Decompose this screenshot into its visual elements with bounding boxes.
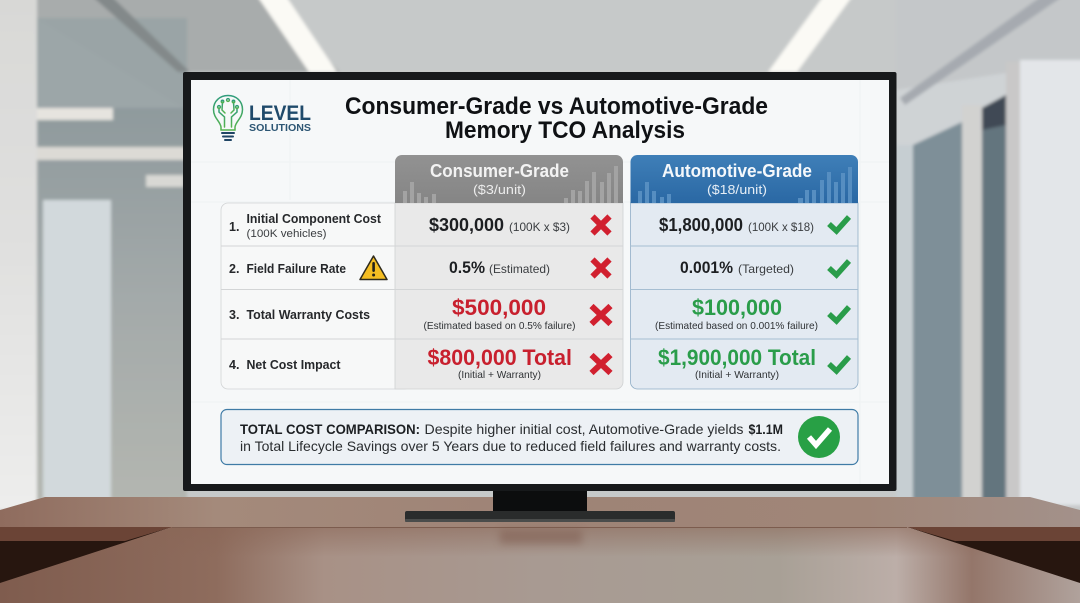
callout: total cost comparison	[221, 410, 858, 464]
icon: red cross	[592, 306, 610, 324]
row 2 label	[229, 256, 387, 280]
panel: automotive-grade column	[630, 155, 858, 389]
header bar decoration	[638, 167, 852, 203]
icon: circuit light bulb	[214, 96, 242, 130]
consumer row 1	[429, 215, 610, 235]
automotive row 2: 0.001%	[680, 258, 733, 277]
header bar decoration	[403, 166, 618, 203]
automotive row 3: (Estimated based on 0.001% failure)	[655, 320, 818, 332]
conference table	[0, 497, 1080, 603]
row 1 label	[229, 212, 382, 240]
consumer row 2	[449, 258, 610, 277]
automotive row 3	[655, 295, 849, 332]
row 4 label: Net Cost Impact	[246, 358, 341, 372]
automotive row 4: (Initial + Warranty)	[695, 369, 779, 381]
icon: green check	[829, 307, 849, 321]
automotive row 1: $1,800,000	[659, 215, 743, 235]
row 4 label: 4.	[229, 358, 239, 372]
row 1 label: (100K vehicles)	[246, 228, 326, 240]
consumer header: ($3/unit)	[473, 182, 526, 197]
consumer row 3	[424, 295, 610, 332]
icon: green check	[829, 217, 849, 231]
icon: warning triangle	[360, 256, 387, 280]
automotive row 3: $100,000	[692, 295, 782, 320]
consumer row 3: (Estimated based on 0.5% failure)	[424, 320, 576, 332]
automotive header: ($18/unit)	[707, 182, 767, 197]
title: Consumer-Grade vs Automotive-Grade	[345, 93, 768, 120]
consumer row 1: $300,000	[429, 215, 504, 235]
automotive row 2: (Targeted)	[738, 262, 794, 276]
monitor stand	[405, 488, 675, 522]
monitor frame	[183, 72, 896, 491]
row 2 label: Field Failure Rate	[246, 262, 346, 276]
automotive header	[630, 155, 858, 203]
row 1 label: 1.	[229, 220, 239, 234]
automotive header: Automotive-Grade	[662, 161, 812, 181]
consumer row 4: $800,000 Total	[428, 345, 572, 370]
consumer row 4	[428, 345, 610, 381]
automotive row 4	[658, 345, 849, 381]
row 1 label: Initial Component Cost	[246, 212, 382, 226]
panel: row labels	[221, 203, 411, 389]
consumer row 2: (Estimated)	[489, 262, 550, 276]
automotive row 2	[680, 258, 849, 277]
consumer row 3: $500,000	[452, 295, 546, 320]
callout: total cost comparison: in Total Lifecycle Savings over 5 Years due to reduced field failures and warranty costs.	[240, 438, 781, 454]
monitor screen	[191, 80, 889, 484]
icon: red cross	[592, 216, 610, 234]
icon: green check	[829, 357, 849, 371]
logo: Level Solutions: SOLUTIONS	[249, 123, 311, 134]
callout: total cost comparison: Despite higher initial cost, Automotive-Grade yields	[424, 421, 744, 437]
row 3 label: Total Warranty Costs	[246, 308, 370, 322]
logo: Level Solutions	[214, 96, 311, 141]
title	[345, 93, 768, 144]
consumer header	[395, 155, 623, 203]
consumer row 2: 0.5%	[449, 258, 485, 277]
automotive row 1	[659, 215, 849, 235]
row 3 label: 3.	[229, 308, 239, 322]
row 2 label: 2.	[229, 262, 239, 276]
icon: green check badge	[798, 416, 840, 458]
consumer row 4: (Initial + Warranty)	[458, 369, 541, 381]
consumer header: Consumer-Grade	[430, 161, 569, 181]
icon: red cross	[592, 355, 610, 373]
icon: green check	[829, 261, 849, 275]
callout: total cost comparison: TOTAL COST COMPARISON:	[240, 421, 420, 437]
title: Memory TCO Analysis	[445, 117, 685, 144]
automotive row 1: (100K x $18)	[748, 220, 814, 234]
automotive row 4: $1,900,000 Total	[658, 345, 816, 370]
panel: consumer-grade column	[221, 155, 623, 389]
icon: red cross	[592, 260, 610, 276]
consumer row 1: (100K x $3)	[509, 220, 570, 234]
logo: Level Solutions: LEVEL	[249, 102, 311, 125]
callout: total cost comparison: $1.1M	[748, 421, 783, 437]
